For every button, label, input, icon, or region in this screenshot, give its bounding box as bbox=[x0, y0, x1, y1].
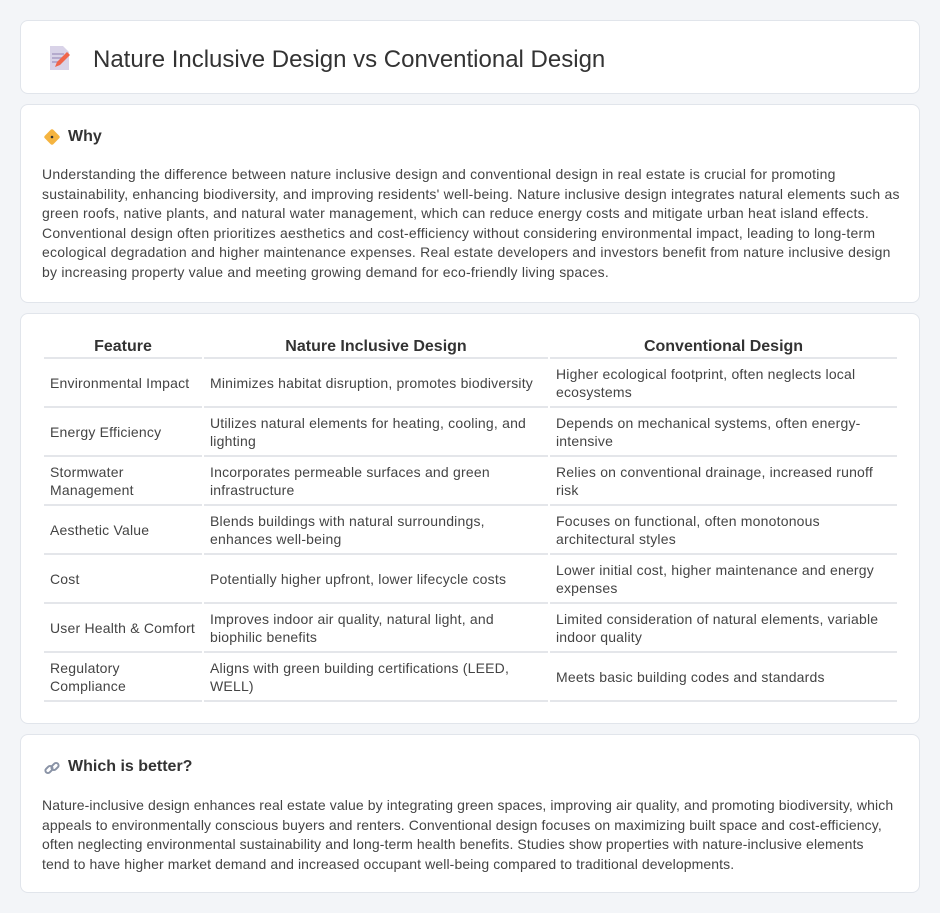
header card bbox=[20, 20, 920, 94]
comparison table: Incorporates permeable surfaces and green infrastructure bbox=[210, 464, 490, 498]
comparison table: Limited consideration of natural elements, variable indoor quality bbox=[556, 610, 878, 644]
why card bbox=[20, 104, 920, 303]
why text bbox=[42, 166, 900, 280]
comparison table: Nature Inclusive Design bbox=[285, 338, 467, 354]
comparison table: Environmental Impact bbox=[50, 374, 189, 390]
better text: appeals to environmentally conscious buyers and renters. Conventional design focuses on maximizing built space and cost-efficiency, bbox=[42, 816, 882, 832]
comparison table: Utilizes natural elements for heating, cooling, and lighting bbox=[210, 414, 526, 448]
comparison table: Cost bbox=[50, 570, 80, 586]
comparison table: Energy Efficiency bbox=[50, 424, 161, 440]
comparison table: Improves indoor air quality, natural light, and biophilic benefits bbox=[210, 610, 494, 644]
comparison table: Potentially higher upfront, lower lifecycle costs bbox=[210, 570, 506, 586]
why text: ecological degradation and higher maintenance expenses. Real estate developers and investors benefit from nature inclusive design bbox=[42, 244, 891, 260]
heading: Why: Why bbox=[68, 128, 102, 145]
comparison table: Relies on conventional drainage, increased runoff risk bbox=[556, 464, 873, 498]
better text: Nature-inclusive design enhances real estate value by integrating green spaces, improving air quality, and promoting biodiversity, which bbox=[42, 797, 893, 813]
comparison table: Aesthetic Value bbox=[50, 522, 149, 538]
comparison table: Blends buildings with natural surroundings, enhances well-being bbox=[210, 512, 485, 546]
better text bbox=[42, 797, 893, 872]
comparison table: Conventional Design bbox=[644, 338, 803, 354]
comparison table: Meets basic building codes and standards bbox=[556, 668, 825, 684]
why text: green roofs, native plants, and natural water management, which can reduce energy costs and mitigate urban heat island effects. bbox=[42, 205, 869, 221]
better text: tend to have higher market demand and increased occupant well-being compared to traditional developments. bbox=[42, 856, 734, 872]
why text: Understanding the difference between nature inclusive design and conventional design in real estate is crucial for promoting bbox=[42, 166, 836, 182]
comparison table: Higher ecological footprint, often neglects local ecosystems bbox=[556, 366, 855, 400]
icon: diamond sign bbox=[44, 129, 60, 145]
comparison table: Aligns with green building certifications (LEED, WELL) bbox=[210, 660, 509, 694]
icon: document with pencil bbox=[50, 46, 70, 70]
comparison table: Stormwater Management bbox=[50, 464, 134, 498]
comparison table card bbox=[20, 313, 920, 724]
icon: link bbox=[44, 762, 60, 774]
comparison table: Feature bbox=[94, 338, 152, 354]
why text: Conventional design often prioritizes aesthetics and cost-efficiency without considering environmental impact, leading to long-term bbox=[42, 224, 875, 240]
comparison table: User Health & Comfort bbox=[50, 620, 195, 636]
why text: by increasing property value and meeting growing demand for eco-friendly living spaces. bbox=[42, 264, 609, 280]
comparison table: Depends on mechanical systems, often energy-intensive bbox=[556, 414, 861, 448]
comparison table: Regulatory Compliance bbox=[50, 660, 126, 694]
title: Nature Inclusive Design vs Conventional Design bbox=[93, 46, 605, 73]
why text: sustainability, enhancing biodiversity, and improving residents' well-being. Nature inclusive design integrates natural elements such as bbox=[42, 186, 900, 202]
which is better card bbox=[20, 734, 920, 893]
comparison table: Lower initial cost, higher maintenance and energy expenses bbox=[556, 562, 874, 596]
heading: Which is better?: Which is better? bbox=[68, 758, 192, 775]
better text: often neglecting environmental sustainability and long-term health benefits. Studies show properties with nature-inclusive elements bbox=[42, 836, 864, 852]
comparison table: Focuses on functional, often monotonous architectural styles bbox=[556, 512, 820, 546]
comparison table: Minimizes habitat disruption, promotes biodiversity bbox=[210, 374, 533, 390]
comparison table bbox=[44, 338, 897, 702]
